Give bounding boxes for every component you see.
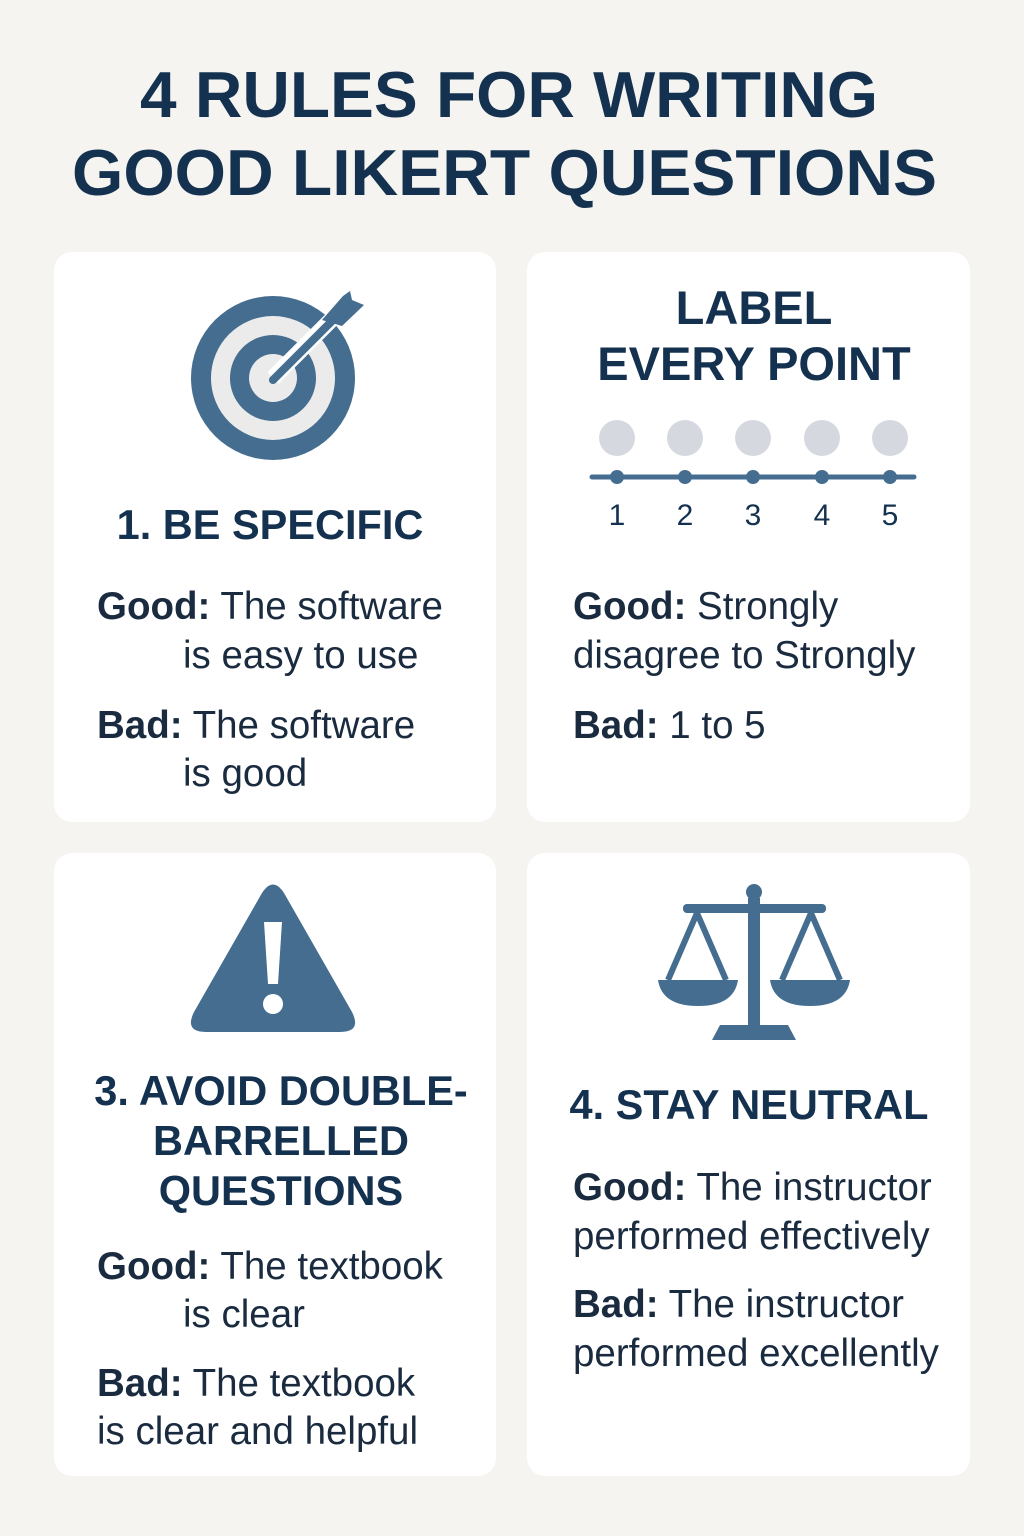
text: bad example: The instructor bbox=[659, 1283, 904, 1326]
text: bad example: Bad: bbox=[97, 704, 183, 747]
text: good example: Good: bbox=[573, 585, 686, 628]
heading: 3. avoid double-barrelled questions: 3. AVOID DOUBLE- bbox=[94, 1067, 468, 1114]
panel: label every point bbox=[527, 252, 970, 822]
text: bad example: Bad: bbox=[97, 1362, 183, 1405]
heading: 3. avoid double-barrelled questions bbox=[94, 1067, 468, 1214]
heading: 4. stay neutral: 4. STAY NEUTRAL bbox=[570, 1081, 928, 1128]
heading: label every point: LABEL bbox=[676, 281, 832, 334]
scale graphic: 1 bbox=[609, 499, 625, 532]
text: good example: The software bbox=[210, 585, 443, 628]
heading: label every point bbox=[597, 281, 911, 390]
panel: stay neutral bbox=[527, 853, 970, 1476]
title bbox=[72, 58, 937, 209]
text: bad example: The software bbox=[183, 704, 415, 747]
text: good example: is clear bbox=[183, 1293, 305, 1336]
text: good example: disagree to Strongly bbox=[573, 634, 916, 677]
title: 4 RULES FOR WRITING bbox=[140, 58, 878, 131]
icon: warning bbox=[191, 884, 355, 1032]
scale graphic bbox=[592, 420, 914, 532]
scale graphic: 4 bbox=[814, 499, 830, 532]
text: good example: Good: bbox=[573, 1166, 686, 1209]
text: good example: is easy to use bbox=[183, 634, 418, 677]
text: good example: performed effectively bbox=[573, 1215, 930, 1258]
title: GOOD LIKERT QUESTIONS bbox=[72, 136, 937, 209]
panel: avoid double-barrelled bbox=[54, 853, 496, 1476]
icon: scales bbox=[658, 884, 850, 1040]
text: good example: Good: bbox=[97, 1245, 210, 1288]
scale graphic: 5 bbox=[882, 499, 898, 532]
text: good example: The textbook bbox=[210, 1245, 444, 1288]
heading: label every point: EVERY POINT bbox=[597, 337, 911, 390]
panel: be specific bbox=[54, 252, 496, 822]
heading: 1. be specific: 1. BE SPECIFIC bbox=[117, 501, 423, 548]
text: bad example: is good bbox=[183, 752, 307, 795]
text: bad example: The textbook bbox=[183, 1362, 416, 1405]
text: bad example: Bad: bbox=[573, 1283, 659, 1326]
text: bad example: Bad: bbox=[573, 704, 659, 747]
text: good example: Strongly bbox=[686, 585, 839, 628]
heading: 3. avoid double-barrelled questions: QUESTIONS bbox=[159, 1167, 403, 1214]
scale graphic: 2 bbox=[677, 499, 693, 532]
text: bad example: performed excellently bbox=[573, 1332, 940, 1375]
text: bad example: 1 to 5 bbox=[659, 704, 766, 747]
text: bad example: is clear and helpful bbox=[97, 1410, 418, 1453]
text: good example: Good: bbox=[97, 585, 210, 628]
heading: 3. avoid double-barrelled questions: BARRELLED bbox=[153, 1117, 409, 1164]
icon: target bbox=[191, 291, 364, 460]
text: good example: The instructor bbox=[686, 1166, 932, 1209]
scale graphic: 3 bbox=[745, 499, 761, 532]
